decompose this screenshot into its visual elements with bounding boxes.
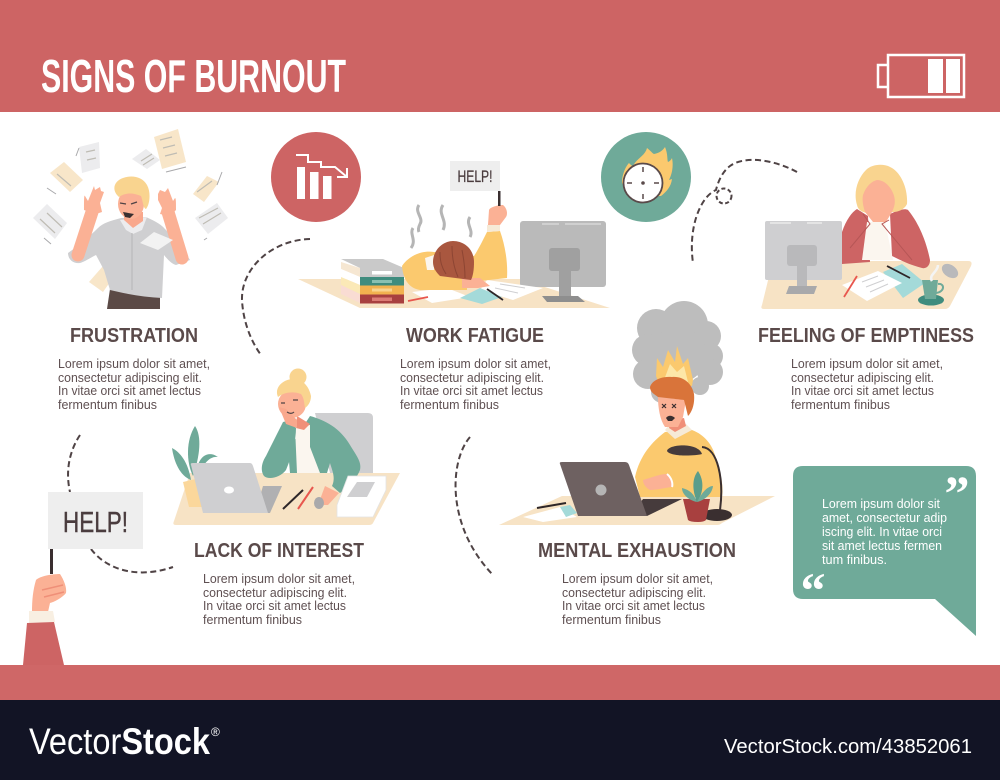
- icon: declining bar chart: [271, 132, 361, 222]
- text block: feeling of emptiness: [791, 357, 943, 412]
- text block: feeling of emptiness: fermentum finibus: [791, 398, 890, 412]
- icon: opening quote: “: [800, 562, 826, 618]
- text block: feeling of emptiness: In vitae orci sit amet lectus: [791, 384, 934, 398]
- icon: low battery: [878, 55, 964, 97]
- callout: quote speech bubble: iscing elit. In vitae orci: [822, 525, 942, 539]
- text block: mental exhaustion: In vitae orci sit amet lectus: [562, 599, 705, 613]
- text block: mental exhaustion: consectetur adipiscing elit.: [562, 586, 706, 600]
- callout: quote speech bubble: tum finibus.: [822, 553, 887, 567]
- callout: quote speech bubble: Lorem ipsum dolor sit: [822, 497, 941, 511]
- logo registered mark: ®: [211, 725, 220, 739]
- text block: lack of interest: In vitae orci sit amet lectus: [203, 599, 346, 613]
- text block: feeling of emptiness: Lorem ipsum dolor sit amet,: [791, 357, 943, 371]
- slumped person: [402, 191, 507, 290]
- text block: lack of interest: [203, 572, 355, 627]
- text block: frustration: In vitae orci sit amet lectus: [58, 384, 201, 398]
- books stack: [341, 259, 404, 304]
- help sign small: [450, 161, 500, 191]
- help sign large: [48, 492, 143, 549]
- hand holding help sign: [23, 492, 143, 665]
- illustration: lack of interest: [172, 368, 400, 525]
- logo wordmark: VectorStock: [29, 721, 210, 762]
- text block: feeling of emptiness: consectetur adipiscing elit.: [791, 371, 934, 385]
- arrow: dashed arc frustration to fatigue: [242, 239, 310, 355]
- arrow: dashed arc around sign: [68, 435, 173, 572]
- arrow: dashed arc interest to exhaustion: [456, 437, 493, 575]
- text block: lack of interest: fermentum finibus: [203, 613, 302, 627]
- text block: work fatigue: fermentum finibus: [400, 398, 499, 412]
- hands: [84, 186, 104, 214]
- stack of papers: [337, 476, 386, 517]
- woman: [262, 368, 360, 493]
- text block: lack of interest: Lorem ipsum dolor sit amet,: [203, 572, 355, 586]
- illustration: mental exhaustion: [499, 301, 775, 525]
- text block: frustration: Lorem ipsum dolor sit amet,: [58, 357, 210, 371]
- heading: feeling of emptiness: FEELING OF EMPTINESS: [758, 324, 974, 347]
- help sign large: HELP!: [63, 507, 128, 539]
- callout: quote speech bubble: amet, consectetur adip: [822, 511, 947, 525]
- text block: frustration: consectetur adipiscing elit.: [58, 371, 202, 385]
- heading: mental exhaustion: MENTAL EXHAUSTION: [538, 539, 736, 562]
- illustration: work fatigue: [298, 161, 610, 308]
- shirt: [68, 217, 190, 298]
- laptop: [560, 462, 682, 516]
- illustration: feeling of emptiness: [761, 165, 972, 309]
- arrow: dashed loop fatigue to emptiness: [692, 160, 797, 263]
- header band: [0, 0, 1000, 112]
- icon: clock on fire: [601, 132, 691, 222]
- callout: quote speech bubble: sit amet lectus fermen: [822, 539, 942, 553]
- text block: frustration: fermentum finibus: [58, 398, 157, 412]
- arms: [78, 212, 92, 255]
- text block: mental exhaustion: fermentum finibus: [562, 613, 661, 627]
- smoke cloud: [632, 301, 723, 403]
- title: SIGNS OF BURNOUT: [41, 50, 346, 102]
- heading: work fatigue: WORK FATIGUE: [406, 324, 544, 347]
- callout: quote speech bubble: [793, 465, 976, 636]
- text block: mental exhaustion: Lorem ipsum dolor sit amet,: [562, 572, 713, 586]
- desk lamp: [667, 445, 732, 521]
- footer: [0, 700, 1000, 780]
- icon: closing quote: ”: [944, 465, 970, 521]
- illustration: frustrated man with flying papers: [33, 129, 228, 309]
- text block: frustration: [58, 357, 210, 412]
- image id: VectorStock.com/43852061: [724, 736, 972, 758]
- text block: work fatigue: In vitae orci sit amet lectus: [400, 384, 543, 398]
- laptop: [191, 463, 282, 513]
- steam: [411, 205, 471, 248]
- bottom band: [0, 665, 1000, 700]
- heading: lack of interest: LACK OF INTEREST: [194, 539, 364, 562]
- text block: work fatigue: [400, 357, 551, 412]
- text block: work fatigue: consectetur adipiscing elit.: [400, 371, 544, 385]
- plant: [172, 426, 218, 507]
- text block: lack of interest: consectetur adipiscing elit.: [203, 586, 347, 600]
- text block: mental exhaustion: [562, 572, 713, 627]
- text block: work fatigue: Lorem ipsum dolor sit amet,: [400, 357, 551, 371]
- heading: frustration: FRUSTRATION: [70, 324, 198, 347]
- plant: [682, 471, 713, 522]
- help sign small: HELP!: [458, 168, 492, 186]
